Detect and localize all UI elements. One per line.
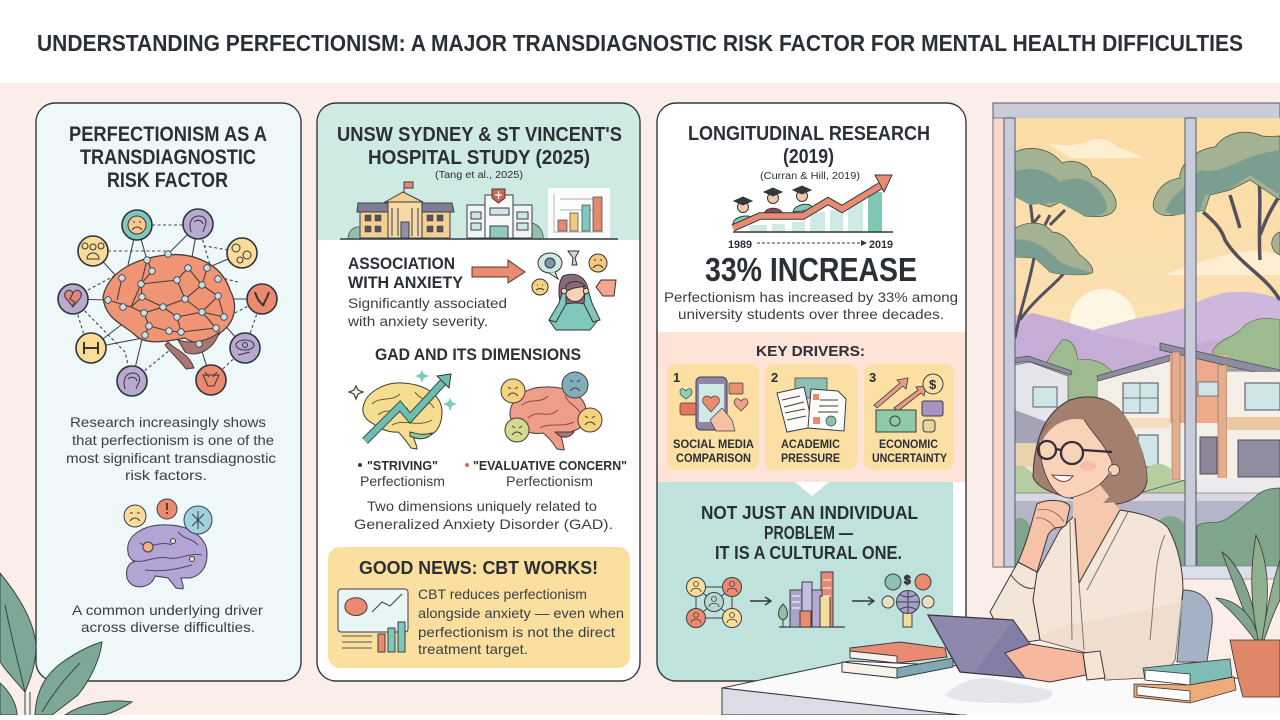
trees xyxy=(1015,172,1280,338)
smile xyxy=(1052,475,1073,482)
big statistic: 33% INCREASE xyxy=(705,251,917,288)
panel heading: HOSPITAL STUDY (2025) xyxy=(368,147,590,169)
card: economic uncertainty xyxy=(864,364,954,470)
icon: striving brain xyxy=(349,370,457,449)
statistic text: Perfectionism has increased by 33% among xyxy=(664,289,958,305)
hair front xyxy=(1080,399,1147,503)
GAD text: Two dimensions uniquely related to xyxy=(367,498,597,514)
conclusion heading xyxy=(701,503,918,563)
callout text: alongside anxiety — even when xyxy=(418,605,624,621)
icon: globe with symbols: $ xyxy=(904,573,911,587)
closing text xyxy=(72,602,263,635)
panel heading: (2019) xyxy=(783,146,834,168)
association text: Significantly associated xyxy=(348,295,507,311)
card: academic pressure: 2 xyxy=(771,370,778,385)
icon: anxious woman xyxy=(532,251,616,330)
card: economic uncertainty: 3 xyxy=(869,370,876,385)
card: academic pressure: PRESSURE xyxy=(781,453,840,465)
body text: most significant transdiagnostic xyxy=(66,450,276,466)
network brain diagram xyxy=(58,209,277,396)
satellite icons xyxy=(58,209,277,396)
callout text: CBT reduces perfectionism xyxy=(418,586,587,602)
hair back xyxy=(1033,397,1147,505)
statistic text: university students over three decades. xyxy=(678,306,944,322)
neck and chest xyxy=(1073,485,1120,583)
card: social media xyxy=(667,364,759,470)
glasses xyxy=(1038,441,1112,464)
hand at chin xyxy=(1018,500,1070,572)
body text: Research increasingly shows xyxy=(70,414,266,430)
panel: longitudinal research xyxy=(657,103,966,681)
lower hand xyxy=(1005,644,1086,682)
houses xyxy=(1015,362,1068,495)
lawn, driveway and low wall xyxy=(1015,464,1197,493)
body text: that perfectionism is one of the xyxy=(72,432,274,448)
card: academic pressure: ACADEMIC xyxy=(781,439,840,451)
card: economic uncertainty: ECONOMIC xyxy=(879,439,938,451)
callout text xyxy=(418,586,624,657)
callout text: treatment target. xyxy=(418,641,528,657)
connector lines xyxy=(73,224,262,381)
panel heading xyxy=(337,124,622,181)
potted plant xyxy=(1216,535,1280,697)
association heading: WITH ANXIETY xyxy=(348,273,464,292)
card: social media: 1 xyxy=(673,370,680,385)
closing text: across diverse difficulties. xyxy=(81,619,255,635)
icon: city skyline xyxy=(778,572,845,627)
body text xyxy=(66,414,276,483)
books left xyxy=(842,642,953,678)
association text: with anxiety severity. xyxy=(347,313,488,329)
arrow xyxy=(852,597,874,605)
panel: transdiagnostic risk factor xyxy=(36,103,301,681)
brain network links xyxy=(108,260,224,335)
dimension labels: Perfectionism xyxy=(360,473,445,489)
panel heading: (Tang et al., 2025) xyxy=(435,170,523,181)
timeline 1989 to 2019 xyxy=(728,239,893,251)
statistic text xyxy=(664,289,958,322)
panel heading: (Curran & Hill, 2019) xyxy=(760,171,860,182)
face xyxy=(1039,412,1112,498)
association heading xyxy=(348,254,464,292)
card: social media: SOCIAL MEDIA xyxy=(673,439,754,451)
timeline 1989 to 2019: 1989 xyxy=(728,239,752,251)
background bushes xyxy=(1043,340,1117,400)
dimension labels: "STRIVING" xyxy=(367,458,438,473)
panel heading: LONGITUDINAL RESEARCH xyxy=(688,123,930,145)
GAD text: Generalized Anxiety Disorder (GAD). xyxy=(354,516,613,532)
panel heading: PERFECTIONISM AS A xyxy=(69,123,267,146)
plant bottom left xyxy=(0,573,132,715)
blush xyxy=(1080,461,1096,471)
brain network nodes xyxy=(105,251,227,347)
icon glyphs xyxy=(65,216,269,389)
conclusion heading: IT IS A CULTURAL ONE. xyxy=(715,543,902,563)
dimension labels: "EVALUATIVE CONCERN" xyxy=(473,458,627,473)
mountains xyxy=(1015,292,1280,400)
panel heading: TRANSDIAGNOSTIC xyxy=(80,146,256,169)
dimension labels: Perfectionism xyxy=(506,473,593,489)
timeline 1989 to 2019: 2019 xyxy=(869,239,893,251)
card: economic uncertainty: $ xyxy=(929,377,937,392)
GAD heading: GAD AND ITS DIMENSIONS xyxy=(375,346,581,364)
callout heading: GOOD NEWS: CBT WORKS! xyxy=(359,558,598,578)
desk xyxy=(722,661,1280,715)
brain xyxy=(103,255,235,343)
card: academic pressure xyxy=(765,364,857,470)
rising trend chart with graduates xyxy=(733,175,893,232)
body text: risk factors. xyxy=(125,467,207,483)
clouds and sun xyxy=(1047,139,1280,275)
callout: good news xyxy=(328,547,630,668)
panel heading: UNSW SYDNEY & ST VINCENT'S xyxy=(337,124,622,146)
icon: therapy chart xyxy=(338,589,408,652)
books right xyxy=(1134,659,1236,703)
conclusion heading: NOT JUST AN INDIVIDUAL xyxy=(701,503,918,523)
panel heading: RISK FACTOR xyxy=(107,169,228,192)
key drivers heading: KEY DRIVERS: xyxy=(756,343,865,360)
panel heading xyxy=(688,123,930,182)
chair xyxy=(1177,590,1212,662)
small brain icon xyxy=(124,499,212,589)
tablet xyxy=(928,615,1032,678)
panel heading xyxy=(69,123,267,192)
association text xyxy=(347,295,507,329)
graduates xyxy=(733,186,812,224)
panel: UNSW study xyxy=(317,103,640,681)
window frame bars xyxy=(1185,118,1196,568)
association heading: ASSOCIATION xyxy=(348,254,455,273)
window with landscape xyxy=(993,103,1280,579)
closing text: A common underlying driver xyxy=(72,602,263,618)
callout text: perfectionism is not the direct xyxy=(418,624,615,640)
icon: university, hospital and chart xyxy=(340,182,618,239)
arrow xyxy=(750,597,771,605)
arrow xyxy=(472,260,525,283)
conclusion heading: PROBLEM — xyxy=(764,523,853,543)
dimension labels xyxy=(358,458,627,489)
icon: evaluative concern brain xyxy=(501,372,602,450)
sleeve xyxy=(990,562,1040,645)
card: social media: COMPARISON xyxy=(676,453,751,465)
blouse xyxy=(1033,510,1183,680)
icon: globe with symbols xyxy=(882,573,934,627)
GAD text xyxy=(354,498,613,532)
woman xyxy=(928,397,1183,682)
icon: people network xyxy=(686,578,742,628)
card: economic uncertainty: UNCERTAINTY xyxy=(872,453,947,465)
